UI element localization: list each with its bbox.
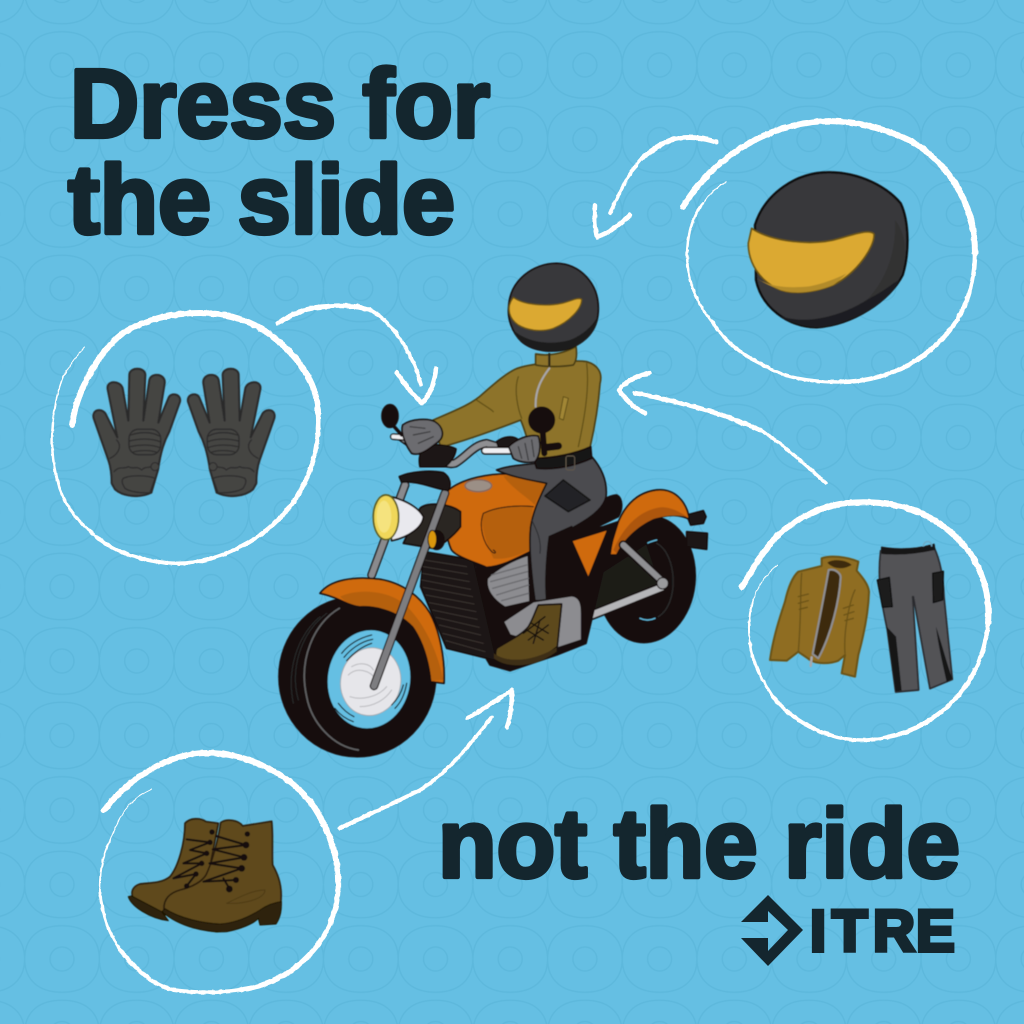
triple clamp — [399, 471, 450, 491]
trousers — [877, 541, 952, 692]
tail light and plate — [687, 511, 707, 549]
gloves illustration — [93, 369, 275, 496]
visor lower band — [757, 273, 847, 292]
logo wordmark: ITRE — [810, 899, 955, 964]
rider belt — [533, 447, 592, 470]
heading: not the ride: not the ride — [438, 789, 960, 898]
seat — [567, 495, 622, 540]
arrow: boots to rider — [340, 690, 512, 828]
engine cylinder — [487, 555, 530, 607]
rider helmet — [508, 263, 598, 351]
chalk circle: helmet — [683, 121, 975, 382]
illustration: rider on motorcycle — [279, 263, 707, 757]
turn signal — [428, 530, 444, 549]
arrow: gloves to rider — [278, 306, 436, 403]
headlight — [373, 495, 423, 541]
right glove — [188, 369, 275, 496]
foot peg guard — [503, 596, 582, 648]
mirrors — [382, 405, 558, 453]
rear fork highlight — [372, 485, 405, 575]
frame and engine block — [457, 522, 618, 671]
front fender — [320, 578, 444, 683]
helmet lower rim — [780, 280, 899, 327]
rear wheel — [592, 511, 701, 647]
helmet illustration — [748, 172, 907, 327]
chalk circle: boots — [100, 753, 338, 992]
helmet side shade — [867, 220, 905, 300]
helmet visor — [748, 228, 874, 292]
brake lever — [497, 437, 518, 447]
rear fender — [610, 490, 689, 555]
side panel — [572, 529, 608, 578]
boots illustration — [128, 819, 281, 932]
jacket collar and zip — [536, 347, 577, 407]
rider trousers — [497, 457, 606, 601]
rear fork leg — [372, 485, 405, 575]
handlebar riser — [419, 445, 456, 467]
rider boot — [494, 604, 562, 665]
fuel tank — [445, 474, 548, 567]
ITRE logo — [741, 895, 955, 966]
front fork highlight — [374, 493, 445, 686]
helmet shell — [755, 172, 907, 327]
title: Dress for the slide — [68, 49, 490, 254]
rider glove: left hand — [402, 419, 442, 454]
rider jacket — [433, 361, 601, 460]
left glove — [93, 369, 180, 496]
chalk circle: gloves — [52, 313, 318, 563]
chalk circle: jacket and trousers — [742, 502, 988, 740]
swingarm — [590, 543, 668, 618]
rear boot — [128, 819, 218, 921]
arrow: helmet to rider — [595, 137, 716, 237]
rider glove: right hand — [509, 436, 540, 462]
front boot — [162, 820, 281, 932]
engine cover behind headlight — [403, 504, 461, 548]
title: Dress for the slide: the slide — [68, 145, 455, 254]
jacket — [770, 557, 869, 677]
handlebar — [393, 437, 510, 464]
clothing illustration — [770, 541, 952, 692]
title: Dress for the slide: Dress for — [70, 49, 490, 158]
icon: diamond arrow — [741, 895, 803, 966]
arrow: clothing to rider — [619, 373, 826, 483]
radiator — [421, 552, 497, 661]
front fork leg — [374, 493, 445, 686]
front wheel — [279, 597, 436, 757]
